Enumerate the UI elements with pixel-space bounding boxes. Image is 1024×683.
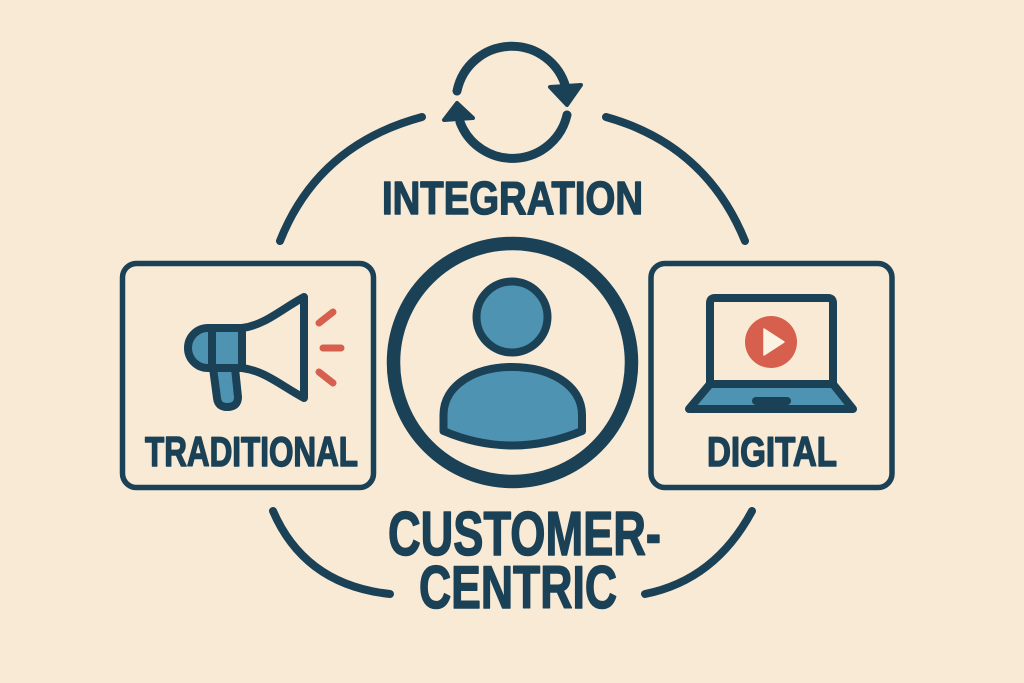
- icon: red sound ticks: [319, 312, 341, 383]
- label: digital: DIGITAL: [707, 428, 837, 475]
- icon: person body: [444, 367, 582, 446]
- panel: traditional: [122, 264, 374, 488]
- heading: customer-centric: [388, 500, 661, 621]
- icon: laptop: [689, 298, 853, 409]
- heading: customer-centric: CUSTOMER-: [388, 500, 661, 569]
- arc: top right: [606, 117, 745, 241]
- heading: customer-centric: CENTRIC: [419, 554, 617, 621]
- icon: person head: [476, 282, 548, 352]
- arc: top left: [280, 117, 422, 241]
- icon: play button: [745, 316, 797, 368]
- arc: bottom left: [273, 511, 390, 594]
- panel: digital: [651, 264, 892, 488]
- icon: megaphone: [188, 297, 304, 407]
- panel: customer center circle: [394, 244, 632, 482]
- arc: bottom right: [645, 511, 752, 594]
- icon: integration cycle arrows: [444, 46, 581, 158]
- heading: integration: INTEGRATION: [382, 172, 643, 224]
- label: traditional: TRADITIONAL: [145, 428, 358, 475]
